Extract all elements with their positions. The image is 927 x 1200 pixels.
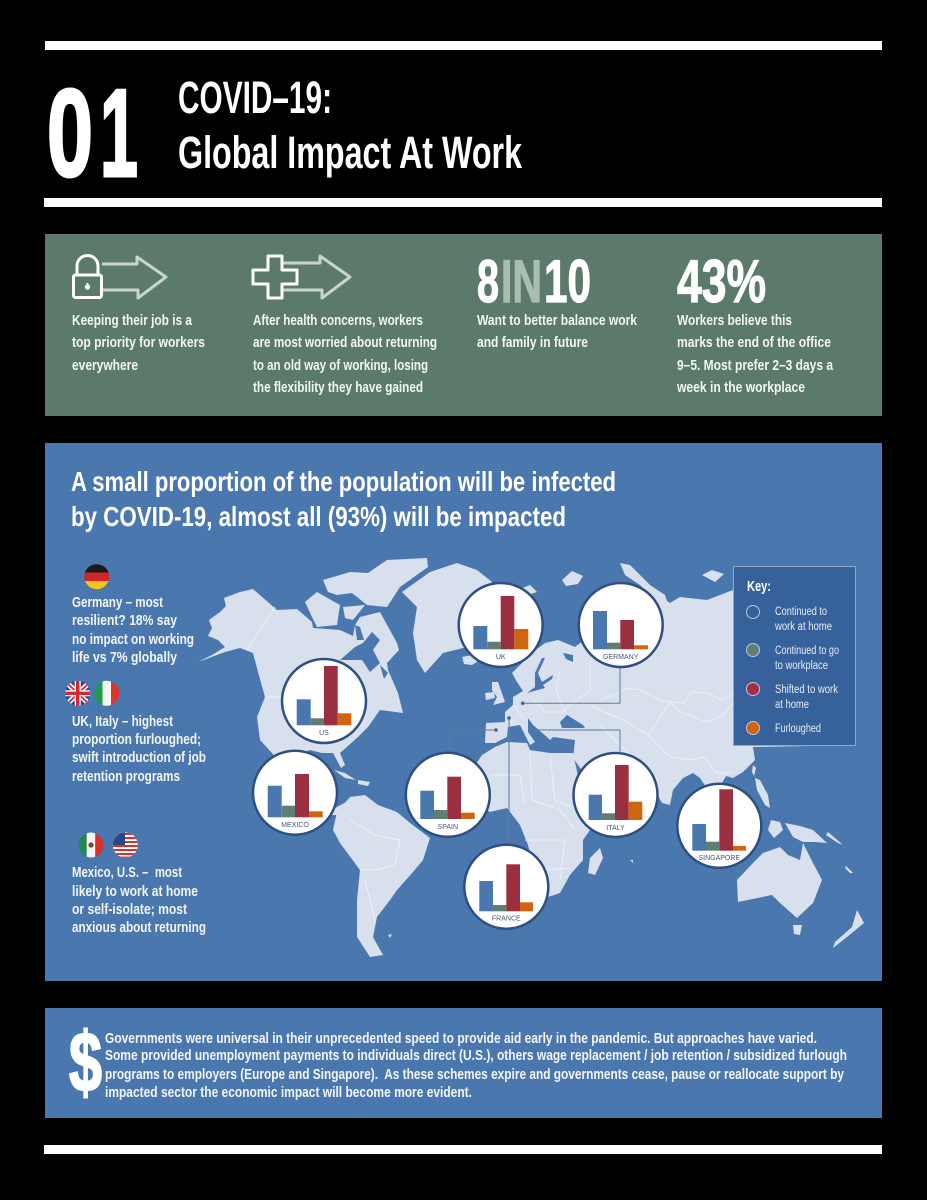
text: job priority — [72, 312, 205, 374]
text: job priority: Keeping their job is a — [72, 312, 193, 329]
chart: US: US — [319, 730, 329, 737]
text: end of office — [676, 312, 834, 396]
text: UK and Italy — [72, 713, 206, 785]
stat: 43%: 43% — [677, 248, 766, 315]
text: job priority: top priority for workers — [72, 334, 205, 351]
chart: Italy — [574, 753, 658, 837]
text: end of office: Workers believe this — [677, 312, 792, 329]
text: Mexico and US: anxious about returning — [72, 919, 206, 936]
panel: government aid — [45, 1008, 882, 1118]
section number: 0 — [47, 65, 93, 203]
text: Mexico and US: or self-isolate; most — [72, 901, 187, 918]
stat: 8 in 10: 10 — [544, 248, 591, 315]
text: balance: Want to better balance work — [477, 312, 638, 329]
flag: Germany — [84, 564, 110, 590]
legend: key: to workplace — [775, 660, 828, 672]
text: UK and Italy: retention programs — [72, 768, 180, 785]
text: Mexico and US — [72, 864, 206, 936]
flag: Italy — [94, 680, 120, 706]
connector lines — [450, 668, 620, 843]
text: end of office: marks the end of the office — [677, 334, 831, 351]
text: health concerns: are most worried about returning — [253, 334, 437, 351]
text: UK and Italy: proportion furloughed; — [72, 731, 201, 748]
flag: US — [112, 832, 139, 858]
heading: A small proportion of the population will be infected — [71, 466, 616, 497]
chart: France — [464, 845, 548, 929]
chart: Italy: ITALY — [606, 825, 625, 832]
chart: Singapore: SINGAPORE — [698, 855, 740, 862]
text: UK and Italy: swift introduction of job — [72, 749, 206, 766]
text: end of office: 9–5. Most prefer 2–3 days a — [677, 357, 834, 374]
text: health concerns — [253, 312, 437, 396]
text: balance — [477, 312, 638, 351]
text: Germany — [72, 594, 194, 666]
world map — [198, 558, 864, 957]
text: Mexico and US: Mexico, U.S. – most — [72, 864, 182, 881]
legend: key: Continued to — [775, 606, 827, 618]
text: government aid: impacted sector the economic impact will become more evident. — [105, 1084, 472, 1101]
chart: Spain — [406, 753, 490, 837]
text: Germany: no impact on working — [72, 631, 194, 648]
title: Global Impact At Work — [178, 127, 523, 178]
chart: Spain: SPAIN — [438, 824, 458, 831]
flag: Mexico — [78, 832, 104, 858]
section number: 1 — [100, 65, 138, 203]
title — [178, 72, 523, 178]
text: health concerns: After health concerns, workers — [253, 312, 423, 329]
chart: Singapore — [677, 784, 761, 868]
legend: key: Furloughed — [775, 723, 821, 735]
text: job priority: everywhere — [72, 357, 138, 374]
title: COVID–19: — [178, 72, 332, 123]
text: health concerns: the flexibility they have gained — [253, 379, 423, 396]
panel: global map — [45, 443, 882, 981]
inland seas — [340, 625, 585, 728]
stat: 8 in 10: IN — [501, 248, 542, 315]
stat: 8 in 10 — [477, 248, 591, 315]
text: Germany: Germany – most — [72, 594, 163, 611]
chart: UK: UK — [496, 654, 506, 661]
borders — [247, 607, 733, 920]
icon: dollar sign: $ — [69, 1015, 102, 1109]
chart: Mexico — [253, 751, 337, 835]
chart: Germany: GERMANY — [603, 654, 639, 661]
text: government aid — [105, 1030, 847, 1101]
heading — [71, 466, 616, 532]
heading: by COVID-19, almost all (93%) will be impacted — [71, 501, 566, 532]
legend: key — [734, 566, 856, 746]
flag: UK — [65, 680, 91, 706]
text: health concerns: to an old way of working, losing — [253, 357, 428, 374]
chart: France: FRANCE — [492, 916, 521, 922]
legend: key: Shifted to work — [775, 684, 838, 696]
text: balance: and family in future — [477, 334, 588, 351]
legend: key: Key: — [747, 578, 771, 595]
panel: key findings — [45, 234, 882, 416]
legend: key: at home — [775, 699, 809, 711]
stat: 8 in 10: 8 — [477, 248, 499, 315]
legend: key: Continued to go — [775, 645, 839, 657]
chart: Mexico: MEXICO — [281, 822, 309, 829]
text: Germany: life vs 7% globally — [72, 649, 178, 666]
text: Mexico and US: likely to work at home — [72, 883, 198, 900]
text: UK and Italy: UK, Italy – highest — [72, 713, 173, 730]
chart: UK — [459, 583, 543, 667]
text: end of office: week in the workplace — [676, 379, 805, 396]
chart: US — [282, 659, 366, 743]
icon: lock with arrow — [74, 256, 166, 298]
text: Germany: resilient? 18% say — [72, 612, 178, 629]
chart: Germany — [579, 583, 663, 667]
legend: key: work at home — [774, 621, 832, 633]
icon: medical cross with arrow — [253, 256, 350, 298]
